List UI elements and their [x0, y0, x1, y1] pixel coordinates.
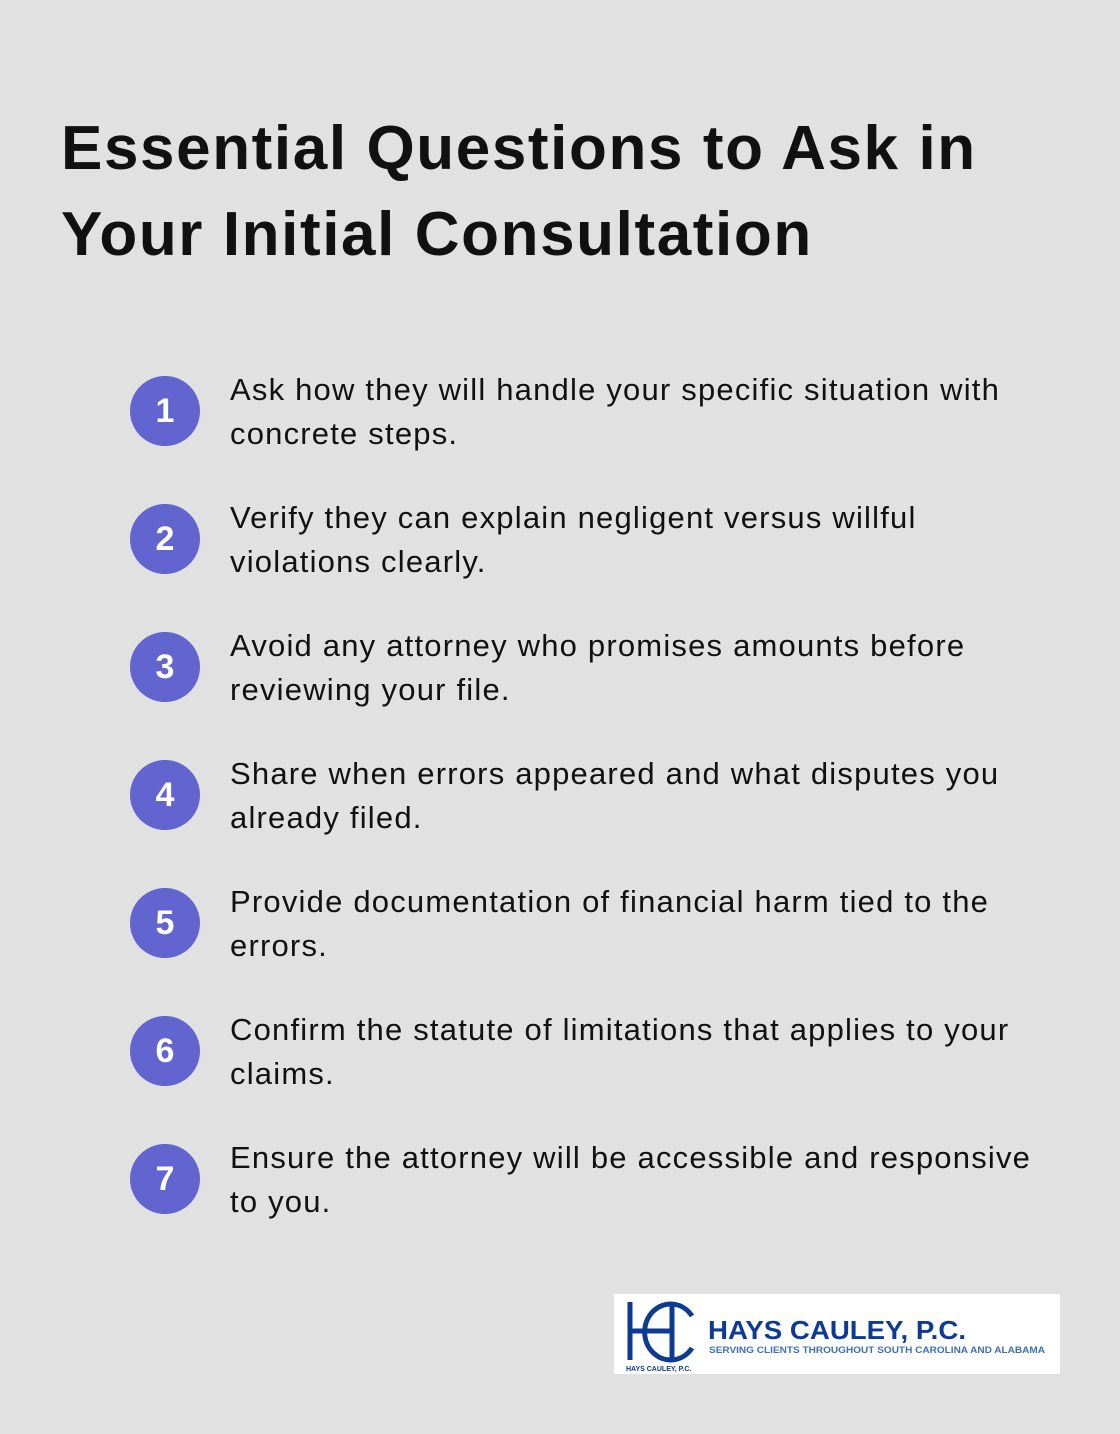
item 3: Avoid any attorney who promises amounts before: [230, 628, 965, 663]
logo: [614, 1294, 1060, 1374]
title: Your Initial Consultation: [61, 200, 813, 269]
item 7: 7: [156, 1160, 174, 1198]
item 5: [130, 884, 989, 963]
item 2: 2: [156, 520, 174, 558]
item 4: Share when errors appeared and what disputes you: [230, 756, 999, 791]
item 7: [130, 1140, 1031, 1219]
title: [61, 114, 977, 269]
logo: SERVING CLIENTS THROUGHOUT SOUTH CAROLINA AND ALABAMA: [709, 1345, 1046, 1355]
item 7: Ensure the attorney will be accessible and responsive: [230, 1140, 1031, 1175]
item 5: 5: [156, 904, 174, 942]
item 3: [130, 628, 965, 707]
item 4: 4: [156, 776, 174, 814]
item 7: to you.: [230, 1184, 331, 1219]
item 2: [130, 500, 917, 579]
item 1: Ask how they will handle your specific situation with: [230, 372, 1000, 407]
item 5: errors.: [230, 928, 328, 963]
item 6: Confirm the statute of limitations that applies to your: [230, 1012, 1009, 1047]
item 2: Verify they can explain negligent versus willful: [230, 500, 917, 535]
item 3: reviewing your file.: [230, 672, 511, 707]
icon: HC monogram: [630, 1302, 692, 1360]
item 4: [130, 756, 999, 835]
item 3: 3: [156, 648, 174, 686]
logo: HAYS CAULEY, P.C.: [708, 1315, 966, 1345]
title: Essential Questions to Ask in: [61, 114, 977, 183]
item 1: 1: [156, 392, 174, 430]
item 2: violations clearly.: [230, 544, 487, 579]
item 1: concrete steps.: [230, 416, 458, 451]
item 6: claims.: [230, 1056, 335, 1091]
logo: HAYS CAULEY, P.C.: [626, 1366, 691, 1373]
item 6: [130, 1012, 1009, 1091]
item 6: 6: [156, 1032, 174, 1070]
item 5: Provide documentation of financial harm tied to the: [230, 884, 989, 919]
item 1: [130, 372, 1000, 451]
item 4: already filed.: [230, 800, 423, 835]
